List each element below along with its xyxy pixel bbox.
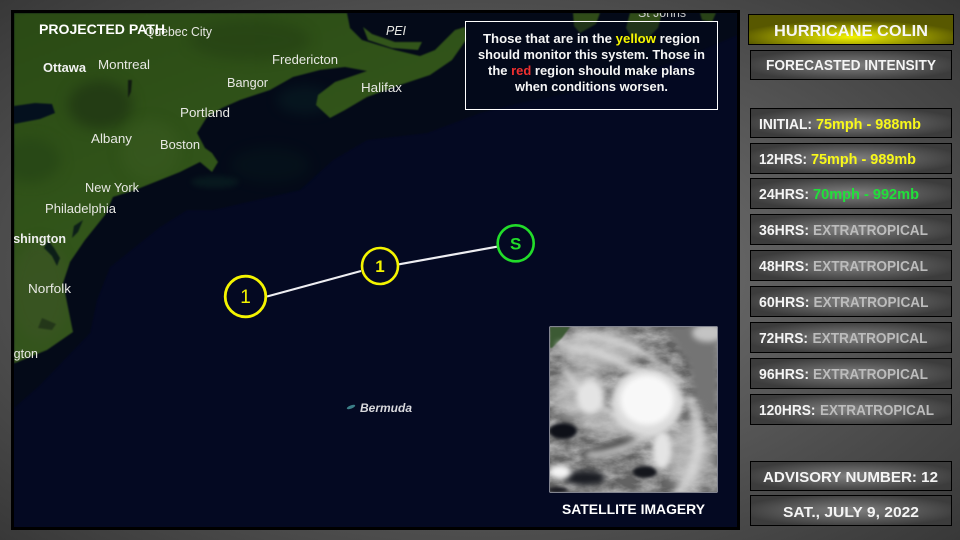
callout: region instructions: should monitor this system. Those in — [478, 47, 705, 62]
row: 48 hours: 48HRS: — [759, 259, 809, 275]
row: 36 hours: 36HRS: — [759, 223, 809, 239]
row: 72 hours: EXTRATROPICAL — [812, 331, 928, 347]
spiral bands — [560, 335, 699, 490]
deep ocean — [14, 13, 737, 527]
row: 60 hours: EXTRATROPICAL — [814, 295, 929, 311]
land: northeast north america — [0, 13, 716, 363]
city labels: Bangor — [227, 76, 268, 90]
row: 72 hours: 72HRS: — [759, 331, 808, 347]
chesapeake bay — [44, 240, 60, 266]
albemarle sound — [38, 318, 56, 330]
terrain shading — [68, 81, 132, 129]
title: hurricane colin: HURRICANE COLIN — [774, 23, 928, 40]
row: 72 hours — [750, 322, 952, 352]
row: 24 hours: 70mph - 992mb — [813, 187, 919, 203]
city labels: Halifax — [361, 81, 403, 95]
row: 24 hours: 24HRS: — [759, 187, 809, 203]
advisory date — [750, 496, 952, 526]
callout: region instructions: when conditions worsen. — [514, 79, 668, 94]
city labels: Norfolk — [28, 282, 72, 296]
heading: projected path: PROJECTED PATH — [39, 22, 165, 37]
callout: region instructions — [466, 22, 718, 110]
caption: satellite imagery: SATELLITE IMAGERY — [562, 502, 705, 517]
city labels: Quebec City — [145, 25, 213, 39]
row: initial: INITIAL: — [759, 117, 812, 133]
marker: category 1 middle: 1 — [375, 257, 385, 276]
land corner — [550, 327, 570, 348]
city labels: Fredericton — [272, 53, 338, 67]
row: 96 hours: 96HRS: — [759, 367, 809, 383]
row: 12 hours — [750, 144, 952, 174]
row: 36 hours — [750, 214, 952, 244]
city labels: Portland — [180, 106, 230, 120]
delaware bay — [72, 220, 83, 238]
row: 60 hours: 60HRS: — [759, 295, 810, 311]
city labels: New York — [85, 181, 140, 195]
title: hurricane colin — [748, 14, 954, 44]
cloud mass west and north — [552, 330, 714, 489]
row: 120 hours — [750, 394, 952, 424]
row: 48 hours — [750, 250, 952, 280]
marker: category 1 at far left — [225, 276, 266, 317]
lake champlain — [128, 80, 132, 98]
bermuda island — [346, 404, 356, 410]
city labels: Montreal — [98, 58, 150, 72]
callout: region instructions: the red region should make plans — [488, 63, 695, 78]
clear sky northeast — [668, 327, 717, 420]
marker: category 1 at far left: 1 — [240, 287, 251, 308]
panel: projected path map — [0, 6, 740, 530]
city labels: Albany — [91, 132, 133, 146]
row: 96 hours: EXTRATROPICAL — [813, 367, 928, 383]
city labels: Bermuda — [360, 401, 412, 415]
city labels: Philadelphia — [45, 202, 116, 216]
gulf of maine water tint — [230, 147, 310, 183]
advisory date: SAT., JULY 9, 2022 — [783, 504, 919, 521]
callout: region instructions: Those that are in the yellow region — [483, 31, 700, 46]
marker: tropical storm — [498, 225, 534, 261]
row: 36 hours: EXTRATROPICAL — [813, 223, 928, 239]
row: initial — [750, 108, 952, 138]
city labels: Boston — [160, 138, 200, 152]
city labels: St Johns — [638, 6, 686, 20]
city labels: PEI — [386, 24, 407, 38]
newfoundland — [573, 13, 662, 40]
city labels — [0, 6, 686, 415]
row: 96 hours — [750, 358, 952, 388]
row: 12 hours: 75mph - 989mb — [811, 152, 916, 168]
heading: forecasted intensity — [750, 50, 952, 80]
lake ontario — [14, 103, 55, 124]
dark ocean gaps — [549, 423, 577, 439]
row: 60 hours — [750, 286, 952, 316]
row: 48 hours: EXTRATROPICAL — [813, 259, 928, 275]
row: initial: 75mph - 988mb — [816, 117, 921, 133]
row: 24 hours — [750, 178, 952, 208]
row: 120 hours: EXTRATROPICAL — [820, 403, 934, 419]
pei island — [363, 27, 422, 50]
heading: forecasted intensity: FORECASTED INTENSITY — [766, 58, 936, 74]
row: 12 hours: 12HRS: — [759, 152, 807, 168]
marker: category 1 middle — [362, 248, 398, 284]
city labels: Ottawa — [43, 61, 87, 75]
row: 120 hours: 120HRS: — [759, 403, 816, 419]
advisory number — [750, 462, 952, 490]
advisory number: ADVISORY NUMBER: 12 — [763, 469, 938, 486]
continental shelf — [14, 13, 737, 408]
marker: tropical storm: S — [510, 234, 521, 254]
track line — [267, 247, 497, 296]
satellite image — [548, 324, 724, 493]
central dense overcast — [611, 368, 683, 436]
